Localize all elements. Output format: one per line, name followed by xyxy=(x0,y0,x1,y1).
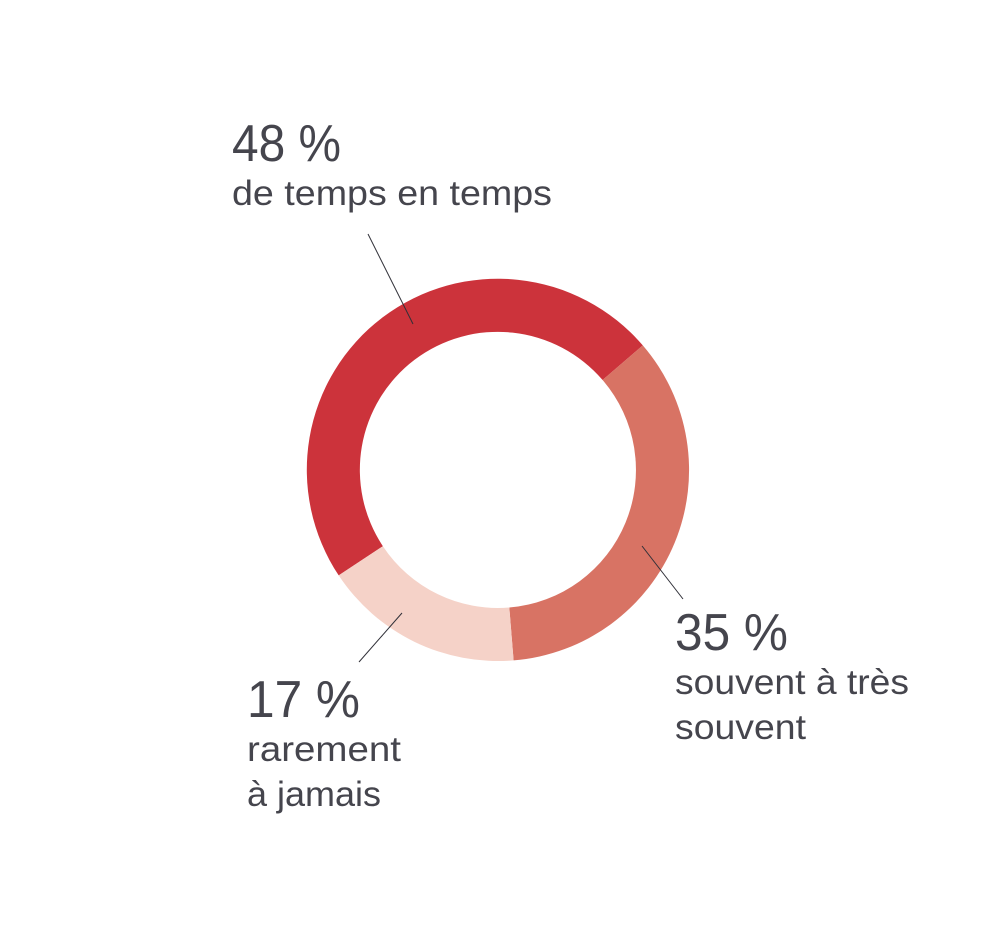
label: 35% souvent à très souvent: souvent à très xyxy=(675,663,909,702)
label: 48% de temps en temps: de temps en temps xyxy=(232,174,552,213)
label: 17% rarement à jamais: 17 % xyxy=(247,671,360,729)
leader line: 35% xyxy=(642,546,683,599)
label: 48% de temps en temps xyxy=(232,115,552,213)
segment: 35% souvent à très souvent xyxy=(509,345,689,660)
label: 35% souvent à très souvent: souvent xyxy=(675,708,806,747)
leader line: 17% xyxy=(359,613,402,662)
label: 17% rarement à jamais: rarement xyxy=(247,730,401,769)
leader line: 48% xyxy=(368,234,413,324)
label: 17% rarement à jamais xyxy=(247,671,401,814)
label: 48% de temps en temps: 48 % xyxy=(232,115,341,173)
segment: 17% rarement à jamais xyxy=(339,546,514,661)
label: 35% souvent à très souvent xyxy=(675,604,909,747)
label: 35% souvent à très souvent: 35 % xyxy=(675,604,788,662)
donut chart xyxy=(307,279,689,661)
label: 17% rarement à jamais: à jamais xyxy=(247,775,381,814)
segment: 48% de temps en temps xyxy=(307,279,643,575)
